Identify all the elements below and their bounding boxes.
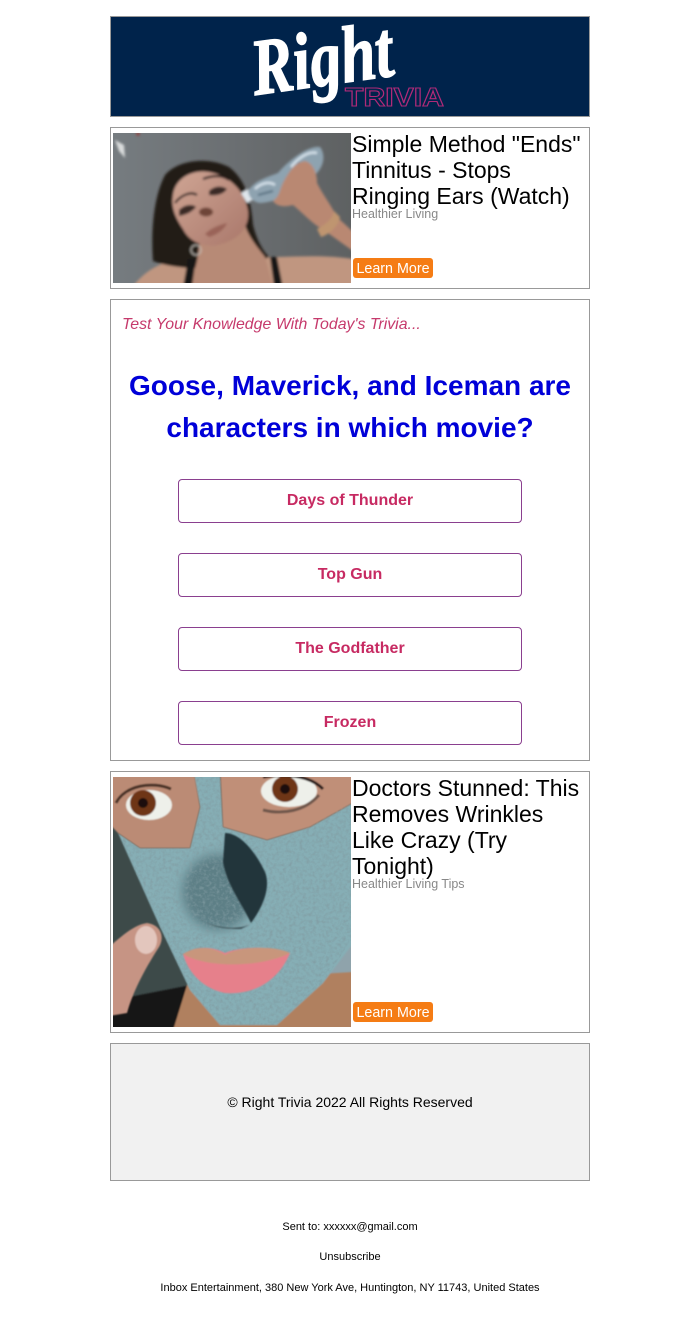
logo: Right Trivia: TRIVIA [345, 82, 444, 112]
answer: Top Gun [178, 553, 522, 597]
neck [171, 972, 363, 1037]
answer: Frozen: Frozen [324, 714, 376, 731]
answer: Frozen [178, 701, 522, 745]
postal address: Inbox Entertainment, 380 New York Ave, Huntington, NY 11743, United States [160, 1282, 540, 1294]
question heading: Goose, Maverick, and Iceman are [129, 370, 571, 401]
answer: Days of Thunder: Days of Thunder [287, 492, 413, 509]
straps [182, 257, 284, 293]
eyes [179, 205, 196, 216]
mask [118, 772, 358, 1025]
headline: wrinkles: Removes Wrinkles [352, 801, 543, 827]
earring [191, 245, 201, 255]
intro text: Test Your Knowledge With Today's Trivia... [122, 316, 421, 333]
answer: The Godfather: The Godfather [295, 640, 405, 657]
hand and arm [273, 161, 363, 258]
button: learn more: Learn More [356, 261, 430, 277]
image: face with clay mask [113, 777, 351, 1027]
source: Healthier Living Tips: Healthier Living Tips [352, 877, 465, 891]
hair [152, 161, 269, 268]
nose shading [113, 777, 351, 1027]
panel: trivia question [110, 299, 590, 761]
nose dark patch [223, 833, 267, 923]
nose and mouth [199, 208, 213, 216]
finger [103, 923, 162, 1017]
bracelet [317, 211, 340, 237]
panel: tinnitus ad [110, 127, 590, 289]
left eye area [103, 767, 200, 848]
question heading: characters in which movie? [166, 412, 534, 443]
answer: Top Gun: Top Gun [318, 566, 382, 583]
shoulders [128, 256, 363, 293]
panel: copyright footer [110, 1043, 590, 1181]
headline: wrinkles [352, 775, 579, 879]
lips [183, 948, 290, 993]
question heading [129, 370, 571, 443]
right eye area [220, 767, 358, 840]
unsubscribe link: Unsubscribe [319, 1251, 381, 1263]
answer: The Godfather [178, 627, 522, 671]
face [172, 171, 248, 245]
headline: tinnitus: Tinnitus - Stops [352, 157, 511, 183]
shirt [103, 985, 191, 1037]
neck [189, 225, 275, 293]
headline: wrinkles: Tonight) [352, 853, 434, 879]
image: woman holding water bottle to ear [113, 133, 351, 283]
headline: tinnitus [352, 131, 581, 209]
answer: Days of Thunder [178, 479, 522, 523]
panel: header banner [110, 16, 590, 117]
button: learn more: Learn More [356, 1005, 430, 1021]
source: Healthier Living: Healthier Living [352, 207, 438, 221]
nostril shadow [198, 917, 253, 929]
headline: tinnitus: Ringing Ears (Watch) [352, 183, 570, 209]
headline: wrinkles: Like Crazy (Try [352, 827, 507, 853]
sent-to line: Sent to: xxxxxx@gmail.com [282, 1221, 418, 1233]
copyright text: © Right Trivia 2022 All Rights Reserved [227, 1094, 473, 1110]
headline: wrinkles: Doctors Stunned: This [352, 775, 579, 801]
headline: tinnitus: Simple Method "Ends" [352, 131, 581, 157]
panel: wrinkles ad [110, 771, 590, 1033]
bottle [241, 189, 254, 203]
